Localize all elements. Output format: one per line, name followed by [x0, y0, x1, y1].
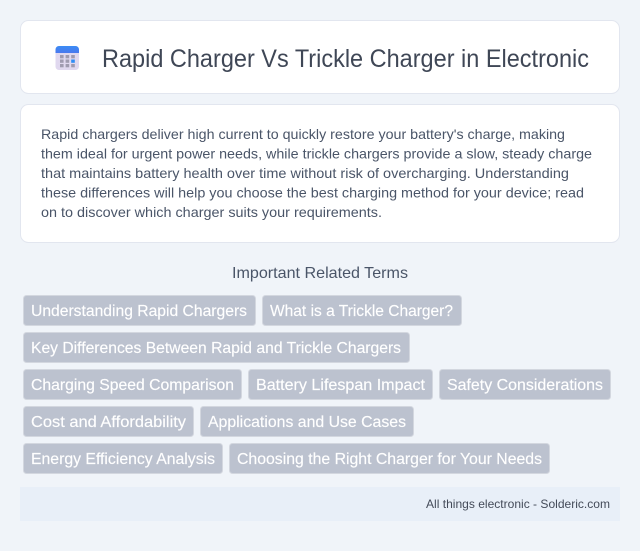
icon: calendar grid	[56, 46, 79, 70]
tag: What is a Trickle Charger?: What is a Trickle Charger?	[270, 303, 453, 320]
title: Rapid Charger Vs Trickle Charger in Electronic	[102, 45, 589, 73]
tag: Applications and Use Cases	[200, 406, 414, 436]
text block: introduction paragraph: on to discover which charger suits your requirements.	[41, 204, 382, 220]
tag: Choosing the Right Charger	[230, 444, 550, 474]
tag: Understanding Rapid Chargers: Understanding Rapid Chargers	[31, 303, 247, 320]
text block: introduction paragraph: that maintains battery health over time without risk of overcharging. Understanding	[41, 165, 569, 181]
tag: Battery Lifespan Impact: Battery Lifespan Impact	[256, 377, 426, 394]
tag: Cost and Affordability: Cost and Affordability	[31, 414, 186, 431]
tag: Safety Considerations	[440, 370, 610, 400]
tag: Key Differences: Key Differences Between Rapid and Trickle Chargers	[31, 340, 401, 357]
heading: important related terms: Important Related Terms	[232, 265, 408, 282]
footer: All things electronic - Solderic.com	[426, 497, 610, 511]
text block: introduction paragraph: Rapid chargers deliver high current to quickly restore your battery's charge, making	[41, 126, 565, 142]
panel: related term tags	[24, 296, 610, 474]
tag: Cost and Affordability	[24, 406, 194, 436]
footer	[20, 487, 620, 521]
text block: introduction paragraph	[41, 126, 592, 220]
tag: Charging Speed Comparison	[24, 370, 242, 400]
tag: Energy Efficiency Analysis: Energy Efficiency Analysis	[31, 451, 215, 468]
tag: Key Differences	[24, 332, 410, 362]
text block: introduction paragraph: them ideal for urgent power needs, while trickle chargers provide a slow, steady charge	[41, 146, 592, 162]
tag: Choosing the Right Charger: Choosing the Right Charger for Your Needs	[237, 451, 542, 468]
tag: Safety Considerations: Safety Considerations	[447, 377, 603, 394]
tag: Charging Speed Comparison: Charging Speed Comparison	[31, 377, 234, 394]
panel: introduction	[20, 104, 620, 242]
tag: Energy Efficiency Analysis	[24, 444, 222, 474]
tag: Applications and Use Cases: Applications and Use Cases	[208, 414, 406, 431]
tag: Understanding Rapid Chargers	[24, 296, 256, 326]
tag: Battery Lifespan Impact	[248, 370, 432, 400]
panel: title card	[20, 20, 620, 94]
text block: introduction paragraph: these differences will help you choose the best charging method for your device; read	[41, 184, 584, 200]
tag: What is a Trickle Charger?	[262, 296, 462, 326]
